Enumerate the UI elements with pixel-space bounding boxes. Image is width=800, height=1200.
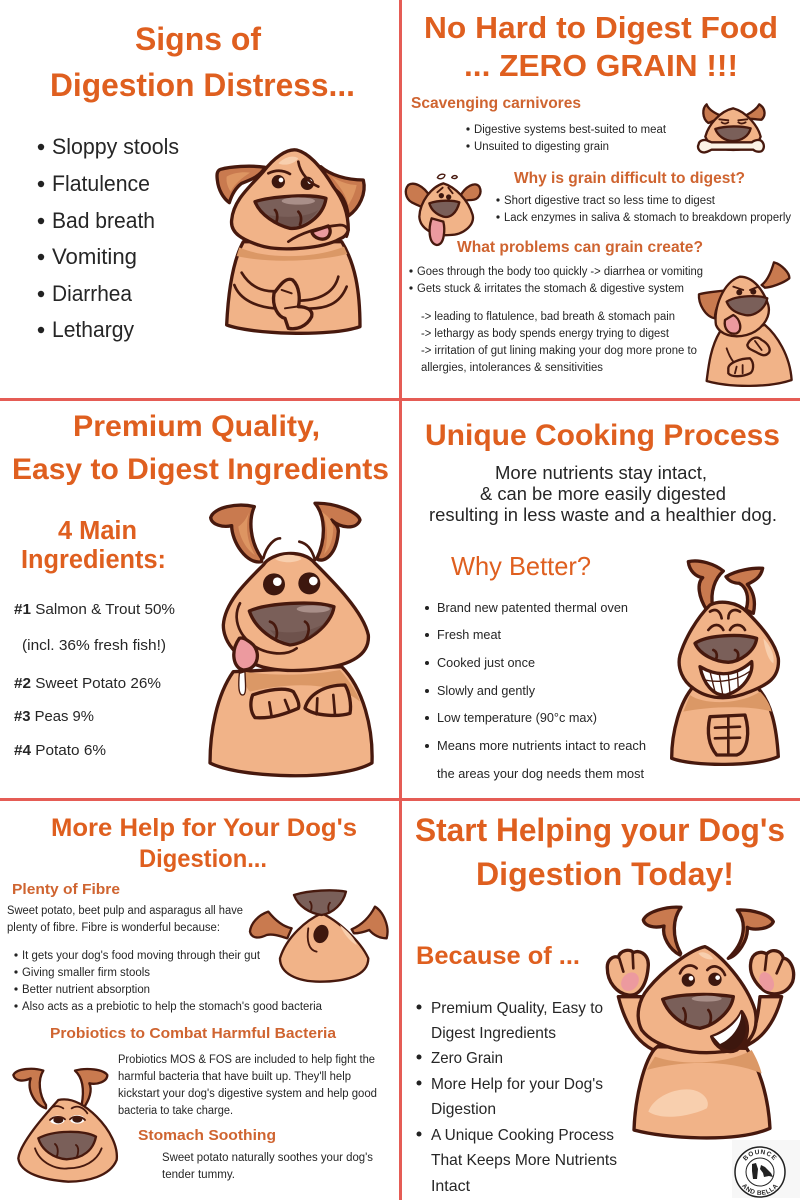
panel: no hard to digest food xyxy=(401,0,800,399)
symptom list: Bad breath xyxy=(52,208,155,233)
intro text: resulting in less waste and a healthier dog. xyxy=(429,505,777,525)
subheading: 4 main ingredients: Ingredients: xyxy=(21,546,166,574)
icon: sweating dog with tongue out xyxy=(406,174,480,245)
panel: start helping today xyxy=(415,812,796,1198)
probiotics text: kickstart your dog's digestive system and help good xyxy=(118,1088,377,1100)
heading: signs of digestion distress: Digestion Distress... xyxy=(50,67,355,103)
symptom list: Diarrhea xyxy=(52,281,133,306)
fibre text: plenty of fibre. Fibre is wonderful because: xyxy=(7,922,220,934)
heading: signs of digestion distress xyxy=(50,21,355,103)
heading: start helping xyxy=(415,812,785,892)
icon: worried dog holding stomach xyxy=(217,150,364,333)
subheading: why is grain difficult: Why is grain difficult to digest? xyxy=(514,170,745,187)
heading: premium quality xyxy=(12,410,389,486)
panel: premium quality ingredients xyxy=(0,401,399,798)
fibre text: Also acts as a prebiotic to help the stomach's good bacteria xyxy=(22,1001,323,1013)
icon: dog with bone xyxy=(698,104,765,152)
problems text: -> leading to flatulence, bad breath & stomach pain xyxy=(421,311,675,323)
ingredients list: #4 Potato 6% xyxy=(14,742,106,759)
soothing text: tender tummy. xyxy=(162,1169,235,1181)
why bullets xyxy=(496,195,791,224)
subheading: 4 main ingredients xyxy=(21,517,166,574)
icon: smiling dog head xyxy=(13,1069,117,1182)
why better list: Cooked just once xyxy=(437,656,535,670)
icon: dog looking up xyxy=(250,890,388,982)
why bullets: Short digestive tract so less time to digest xyxy=(504,195,716,207)
icon: happy dog with tongue and paws xyxy=(210,503,372,776)
reasons list xyxy=(416,1000,617,1195)
why better list: Brand new patented thermal oven xyxy=(437,601,628,615)
subheading: what problems can grain create: What problems can grain create? xyxy=(457,239,703,256)
carnivores bullets: Digestive systems best-suited to meat xyxy=(474,124,667,136)
heading: zero grain xyxy=(424,10,778,83)
heading: signs of digestion distress: Signs of xyxy=(135,21,261,57)
heading: start helping: Start Helping your Dog's xyxy=(415,812,785,848)
fibre text: Better nutrient absorption xyxy=(22,984,150,996)
reasons list: Digest Ingredients xyxy=(431,1025,556,1042)
panel: unique cooking process xyxy=(401,401,800,798)
reasons list: Premium Quality, Easy to xyxy=(431,1000,603,1017)
subheading: because of: Because of ... xyxy=(416,942,580,970)
fibre text: It gets your dog's food moving through their gut xyxy=(22,950,261,962)
symptom list: Flatulence xyxy=(52,171,150,196)
why bullets: Lack enzymes in saliva & stomach to breakdown properly xyxy=(504,212,791,224)
heading: unique cooking process: Unique Cooking Process xyxy=(425,419,780,452)
why better list xyxy=(425,601,646,781)
subheading: scavenging carnivores: Scavenging carnivores xyxy=(411,95,581,112)
probiotics text: Probiotics MOS & FOS are included to help fight the xyxy=(118,1054,375,1066)
why better list: the areas your dog needs them most xyxy=(437,767,645,781)
logo: bounce and bella: BOUNCE xyxy=(742,1149,777,1161)
problems text: Gets stuck & irritates the stomach & digestive system xyxy=(417,283,684,295)
why better list: Low temperature (90°c max) xyxy=(437,711,597,725)
heading: premium quality: Premium Quality, xyxy=(73,410,320,443)
symptom list: Vomiting xyxy=(52,244,137,269)
subheading: plenty of fibre: Plenty of Fibre xyxy=(12,881,120,898)
heading: more help: Digestion... xyxy=(139,845,267,873)
intro text xyxy=(429,463,777,525)
fibre text: Giving smaller firm stools xyxy=(22,967,150,979)
reasons list: Intact xyxy=(431,1178,471,1195)
probiotics text: harmful bacteria that have built up. They'll help xyxy=(118,1071,351,1083)
logo: bounce and bella xyxy=(734,1146,786,1198)
subheading: 4 main ingredients: 4 Main xyxy=(58,517,137,545)
ingredients list: (incl. 36% fresh fish!) xyxy=(22,637,166,654)
heading: more help xyxy=(51,814,357,873)
heading: start helping: Digestion Today! xyxy=(476,856,734,892)
soothing text: Sweet potato naturally soothes your dog's xyxy=(162,1152,373,1164)
panel: more help for digestion xyxy=(0,801,399,1200)
reasons list: More Help for your Dog's xyxy=(431,1076,603,1093)
soothing text xyxy=(162,1152,373,1181)
why better list: Fresh meat xyxy=(437,628,502,642)
ingredients list: #2 Sweet Potato 26% xyxy=(14,675,161,692)
subheading: why better: Why Better? xyxy=(451,551,591,581)
problems text: -> lethargy as body spends energy trying to digest xyxy=(421,328,670,340)
reasons list: A Unique Cooking Process xyxy=(431,1127,614,1144)
logo: bounce and bella: AND BELLA xyxy=(742,1184,778,1195)
problems text xyxy=(409,266,703,374)
fibre text xyxy=(7,905,323,1013)
why better list: Slowly and gently xyxy=(437,684,536,698)
probiotics text: bacteria to take charge. xyxy=(118,1105,233,1117)
intro text: More nutrients stay intact, xyxy=(495,463,707,483)
icon: grumpy dog licking lips xyxy=(699,262,792,386)
problems text: Goes through the body too quickly -> diarrhea or vomiting xyxy=(417,266,703,278)
heading: zero grain: No Hard to Digest Food xyxy=(424,10,778,45)
ingredients list xyxy=(14,601,175,759)
heading: premium quality: Easy to Digest Ingredients xyxy=(12,453,389,486)
heading: zero grain: ... ZERO GRAIN !!! xyxy=(464,48,738,83)
carnivores bullets xyxy=(466,124,667,153)
carnivores bullets: Unsuited to digesting grain xyxy=(474,141,609,153)
why better list: Means more nutrients intact to reach xyxy=(437,739,646,753)
symptom list: Sloppy stools xyxy=(52,134,179,159)
symptom list xyxy=(38,134,179,342)
problems text: allergies, intolerances & sensitivities xyxy=(421,362,603,374)
fibre text: Sweet potato, beet pulp and asparagus all have xyxy=(7,905,243,917)
subheading: stomach soothing: Stomach Soothing xyxy=(138,1127,276,1144)
subheading: probiotics: Probiotics to Combat Harmful Bacteria xyxy=(50,1025,337,1042)
reasons list: Zero Grain xyxy=(431,1050,503,1067)
heading: more help: More Help for Your Dog's xyxy=(51,814,357,842)
icon: grinning dog with clasped paws xyxy=(672,561,778,764)
symptom list: Lethargy xyxy=(52,317,134,342)
problems text: -> irritation of gut lining making your dog more prone to xyxy=(421,345,697,357)
intro text: & can be more easily digested xyxy=(480,484,726,504)
ingredients list: #1 Salmon & Trout 50% xyxy=(14,601,175,618)
probiotics text xyxy=(118,1054,377,1117)
panel: signs of digestion distress xyxy=(0,0,399,399)
reasons list: That Keeps More Nutrients xyxy=(431,1152,617,1169)
ingredients list: #3 Peas 9% xyxy=(14,708,94,725)
icon: cheering dog with raised paws xyxy=(607,907,794,1138)
reasons list: Digestion xyxy=(431,1101,496,1118)
